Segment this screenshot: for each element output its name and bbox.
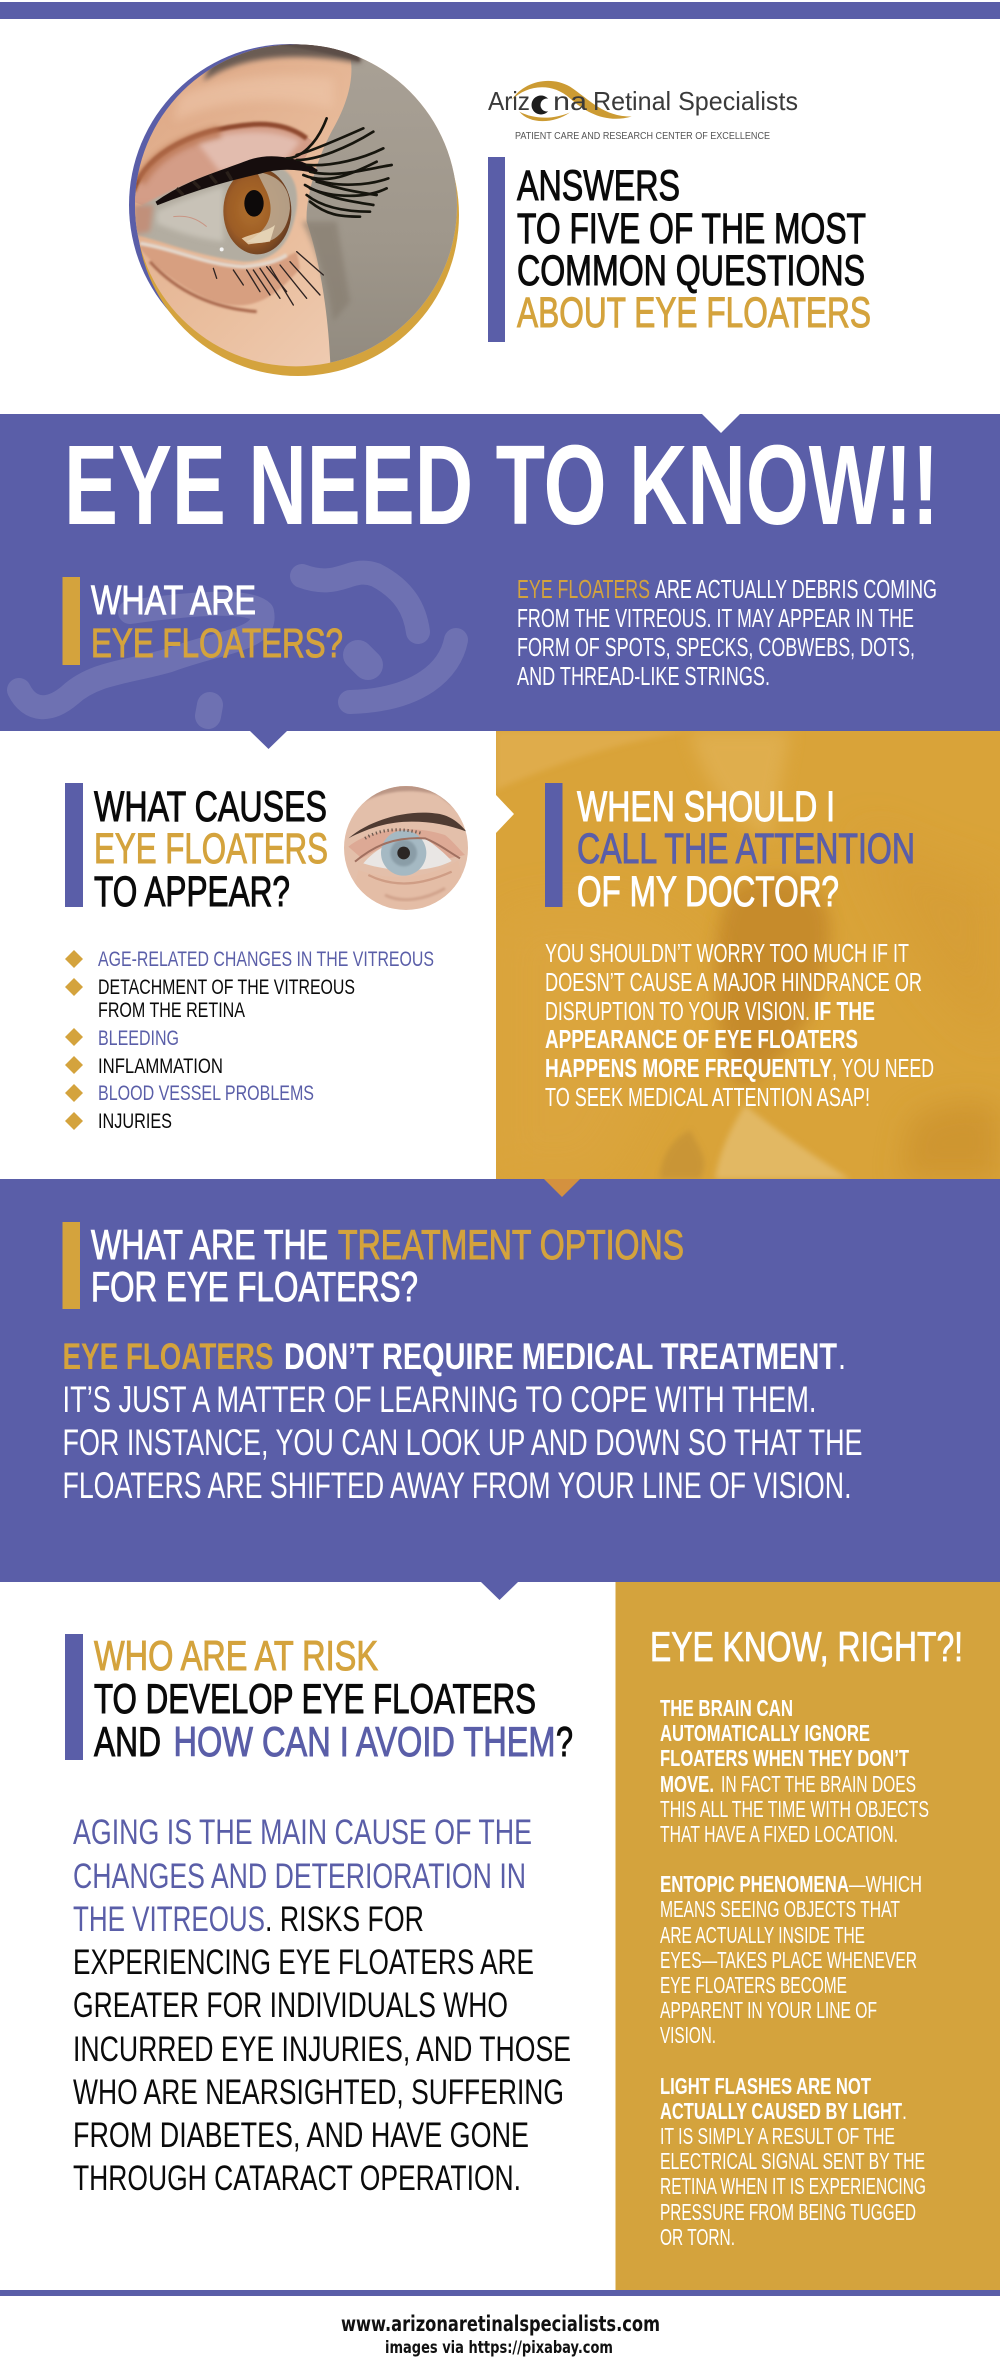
- fact: brain ignores floaters: THAT HAVE A FIXED LOCATION.: [660, 1821, 898, 1847]
- heading: [94, 1632, 573, 1765]
- advice text: IF THE: [814, 998, 875, 1026]
- fact: brain ignores floaters: THE BRAIN CAN: [660, 1695, 793, 1721]
- risk text: . RISKS FOR: [265, 1899, 424, 1939]
- footer credits: [341, 2312, 660, 2357]
- heading: TO DEVELOP EYE FLOATERS: [94, 1675, 536, 1722]
- fact: brain ignores floaters: MOVE.: [660, 1771, 714, 1797]
- risk text: EXPERIENCING EYE FLOATERS ARE: [73, 1942, 534, 1982]
- cause list: BLOOD VESSEL PROBLEMS: [98, 1081, 314, 1105]
- treatment text: DON’T REQUIRE MEDICAL TREATMENT: [284, 1336, 837, 1377]
- fact: light flashes: ACTUALLY CAUSED BY LIGHT: [660, 2098, 902, 2124]
- heading: WHO ARE AT RISK: [94, 1632, 378, 1679]
- fact: entopic phenomena: ENTOPIC PHENOMENA: [660, 1871, 849, 1897]
- fact: entopic phenomena: —WHICH: [849, 1871, 922, 1897]
- fact: entopic phenomena: [660, 1871, 922, 2048]
- icon: blue eye photo: [344, 786, 468, 910]
- fact: light flashes: IT IS SIMPLY A RESULT OF THE: [660, 2123, 895, 2149]
- logo: Arizona Retinal Specialists: na: [553, 86, 588, 116]
- accent bar: [62, 577, 80, 665]
- risk text: [73, 1812, 571, 2198]
- fact: brain ignores floaters: AUTOMATICALLY IGNORE: [660, 1720, 870, 1746]
- advice text: APPEARANCE OF EYE FLOATERS: [545, 1026, 858, 1054]
- pointer to risk panel: [481, 1582, 518, 1600]
- fact: entopic phenomena: ARE ACTUALLY INSIDE THE: [660, 1922, 865, 1948]
- logo: Arizona Retinal Specialists: o: [534, 86, 549, 116]
- panel: eye know, right sidebar: [616, 1582, 1000, 2290]
- heading: [577, 783, 915, 916]
- fact: light flashes: .: [902, 2098, 907, 2124]
- heading: EYE FLOATERS: [94, 825, 328, 873]
- risk text: THROUGH CATARACT OPERATION.: [73, 2158, 521, 2198]
- heading: OF MY DOCTOR?: [577, 868, 839, 916]
- risk text: INCURRED EYE INJURIES, AND THOSE: [73, 2029, 571, 2069]
- fact: light flashes: OR TORN.: [660, 2224, 735, 2250]
- advice text: HAPPENS MORE FREQUENTLY: [545, 1055, 832, 1083]
- heading: TREATMENT OPTIONS: [338, 1221, 684, 1268]
- cause list: INFLAMMATION: [98, 1054, 223, 1078]
- main title: ANSWERS: [517, 162, 680, 210]
- panel: who are at risk: [65, 1632, 573, 2198]
- logo: Arizona Retinal Specialists: Retinal Specialists: [593, 86, 798, 116]
- accent bar: [65, 1634, 83, 1760]
- logo: Arizona Retinal Specialists: Ariz: [488, 86, 530, 116]
- cause list: BLEEDING: [98, 1026, 179, 1050]
- treatment text: .: [838, 1336, 846, 1377]
- heading: FOR EYE FLOATERS?: [91, 1263, 418, 1310]
- advice text: [545, 940, 934, 1112]
- heading: [91, 577, 343, 666]
- risk text: GREATER FOR INDIVIDUALS WHO: [73, 1985, 508, 2025]
- heading: WHAT ARE THE: [91, 1221, 328, 1268]
- fact: light flashes: [660, 2073, 926, 2250]
- panel: treatment options: [0, 1179, 1000, 1582]
- description text: [517, 576, 937, 691]
- heading: EYE FLOATERS?: [91, 620, 343, 666]
- top bar: [0, 2, 1000, 19]
- advice text: , YOU NEED: [832, 1055, 934, 1083]
- cause list: INJURIES: [98, 1109, 172, 1133]
- fact: brain ignores floaters: FLOATERS WHEN THEY DON’T: [660, 1745, 909, 1771]
- panel: when should i call my doctor: [496, 731, 1000, 1179]
- accent bar: [545, 783, 562, 907]
- accent bar: [65, 783, 83, 907]
- risk text: THE VITREOUS: [73, 1899, 265, 1939]
- fact: entopic phenomena: EYE FLOATERS BECOME: [660, 1972, 847, 1998]
- treatment text: EYE FLOATERS: [62, 1336, 274, 1377]
- main title: TO FIVE OF THE MOST: [517, 205, 866, 253]
- heading: WHAT CAUSES: [94, 783, 327, 831]
- heading: WHAT ARE: [91, 577, 256, 623]
- fact: light flashes: LIGHT FLASHES ARE NOT: [660, 2073, 871, 2099]
- heading: ?: [556, 1718, 573, 1765]
- fact: entopic phenomena: APPARENT IN YOUR LINE OF: [660, 1997, 877, 2023]
- accent bar: [62, 1222, 80, 1309]
- notch: [702, 414, 740, 433]
- advice text: TO SEEK MEDICAL ATTENTION ASAP!: [545, 1084, 870, 1112]
- heading: [94, 783, 328, 916]
- footer credits: images via https://pixabay.com: [385, 2338, 613, 2357]
- notch: [496, 795, 514, 833]
- bottom bar: [0, 2290, 1000, 2296]
- risk text: CHANGES AND DETERIORATION IN: [73, 1856, 526, 1896]
- heading: [91, 1221, 684, 1310]
- cause list: DETACHMENT OF THE VITREOUS: [98, 975, 355, 999]
- risk text: FROM DIABETES, AND HAVE GONE: [73, 2115, 529, 2155]
- logo: Arizona Retinal Specialists: PATIENT CARE AND RESEARCH CENTER OF EXCELLENCE: [515, 130, 770, 142]
- cause list: FROM THE RETINA: [98, 998, 245, 1022]
- heading: TO APPEAR?: [94, 868, 290, 916]
- advice text: DISRUPTION TO YOUR VISION.: [545, 998, 810, 1026]
- pointer to causes panel: [250, 731, 287, 749]
- header accent bar: [488, 157, 505, 342]
- risk text: AGING IS THE MAIN CAUSE OF THE: [73, 1812, 532, 1852]
- main title: COMMON QUESTIONS: [517, 247, 865, 295]
- footer credits: www.arizonaretinalspecialists.com: [341, 2312, 660, 2336]
- fact: brain ignores floaters: [660, 1695, 929, 1847]
- heading: AND: [94, 1718, 161, 1765]
- main title: ABOUT EYE FLOATERS: [517, 289, 871, 337]
- panel: what are eye floaters: [0, 414, 1000, 731]
- panel: what causes eye floaters: [65, 775, 482, 1133]
- risk text: WHO ARE NEARSIGHTED, SUFFERING: [73, 2072, 564, 2112]
- main title: [517, 162, 871, 337]
- heading: WHEN SHOULD I: [577, 783, 835, 831]
- treatment text: [62, 1336, 862, 1506]
- description text: AND THREAD-LIKE STRINGS.: [517, 663, 770, 691]
- description text: EYE FLOATERS: [517, 576, 650, 604]
- cause list: AGE-RELATED CHANGES IN THE VITREOUS: [98, 947, 434, 971]
- background photo tint: [496, 731, 1000, 1179]
- heading: HOW CAN I AVOID THEM: [174, 1718, 556, 1765]
- pointer: [544, 1179, 580, 1197]
- fact: entopic phenomena: VISION.: [660, 2022, 716, 2048]
- cause list: [65, 947, 434, 1133]
- floaters decoration: [19, 573, 456, 716]
- logo: Arizona Retinal Specialists: [488, 81, 798, 142]
- hero eye photo circle: [129, 44, 459, 376]
